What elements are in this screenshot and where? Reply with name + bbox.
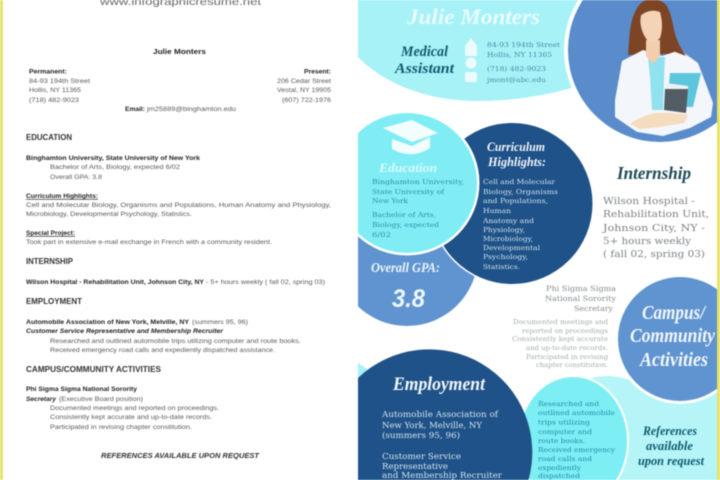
sorority text block: and up-to-date records.	[526, 345, 608, 352]
contact details: Hollis, NY 11365	[487, 51, 552, 59]
education circle: Binghamton University,	[372, 178, 464, 186]
GPA circle	[357, 236, 476, 327]
internship block: Rehabilitation Unit,	[603, 209, 709, 220]
yellow left edge	[0, 0, 3, 480]
illustration: woman with books	[615, 0, 713, 136]
panel: plain text resume	[26, 47, 331, 460]
education section: EDUCATION	[26, 132, 72, 142]
yellow right edge	[717, 0, 720, 480]
education circle: Biology, expected	[372, 221, 440, 229]
employment circle: Customer Service	[382, 451, 461, 461]
campus activities section: Phi Sigma Sigma National Sorority	[26, 386, 137, 393]
education section: Microbiology, Developmental Psychology, Statistics.	[26, 211, 192, 218]
curriculum highlights circle: and Populations,	[483, 197, 548, 205]
education section: Bachelor of Arts, Biology, expected 6/02	[50, 164, 180, 171]
icon: graduation cap	[383, 120, 438, 154]
contact details	[486, 41, 560, 84]
education section: Binghamton University, State University of New York	[26, 155, 200, 162]
internship block: Internship	[616, 163, 691, 183]
employment circle: New York, Melville, NY	[382, 420, 483, 430]
sorority text block: Consistently kept accurate	[512, 336, 608, 343]
sorority text block	[512, 284, 617, 369]
employment section	[26, 296, 301, 354]
employment section: Automobile Association of New York, Melville, NY	[26, 319, 190, 326]
employment circle: and Membership Recruiter	[382, 470, 502, 480]
education section: Special Project:	[26, 230, 75, 237]
employment section: Received emergency road calls and expediently dispatched assistance.	[50, 347, 275, 354]
employment circle: Automobile Association of	[381, 409, 499, 419]
resume name: Julie Monters	[153, 47, 206, 56]
curriculum highlights circle: Human	[483, 207, 512, 215]
internship section: Wilson Hospital - Rehabilitation Unit, Johnson City, NY	[26, 279, 205, 286]
duties circle: dispatched	[538, 472, 581, 480]
internship section	[26, 256, 325, 286]
permanent address: 84-93 194th Street	[29, 78, 90, 85]
duties circle: outlined automobile	[538, 409, 615, 417]
duties circle: computer and	[538, 428, 593, 436]
campus activities circle: Campus/	[642, 302, 707, 324]
employment section: (summers 95, 96)	[192, 319, 248, 326]
curriculum highlights circle: Curriculum	[487, 139, 545, 154]
employment circle: Employment	[392, 374, 486, 395]
references line: REFERENCES AVAILABLE UPON REQUEST	[101, 451, 260, 460]
curriculum highlights circle: Highlights:	[487, 154, 546, 169]
contact icons	[465, 38, 477, 82]
present address: Vestal, NY 19905	[277, 87, 331, 94]
GPA circle: Overall GPA:	[371, 260, 440, 275]
campus activities section: Documented meetings and reported on proceedings.	[50, 405, 219, 412]
email line: jm25889@binghamton.edu	[146, 106, 236, 113]
employment section: Customer Service Representative and Membership Recruiter	[26, 328, 223, 335]
curriculum highlights circle: Physiology,	[483, 226, 525, 234]
permanent address	[29, 68, 90, 104]
sorority text block: reported on proceedings	[522, 328, 608, 335]
contact details: jmont@abc.edu	[486, 76, 547, 84]
email line: Email:	[125, 106, 145, 113]
small cyan triangle	[358, 362, 368, 378]
internship section: - 5+ hours weekly ( fall 02, spring 03)	[206, 279, 325, 286]
duties circle: expediently	[538, 464, 581, 472]
internship block: Wilson Hospital -	[603, 196, 695, 207]
campus activities section: Participated in revising chapter constitution.	[50, 424, 192, 431]
present address	[277, 68, 331, 104]
internship block: 5+ hours weekly	[603, 236, 692, 247]
references text: upon request	[638, 453, 704, 468]
curriculum highlights circle: Psychology,	[483, 253, 528, 261]
employment section: Researched and outlined automobile trips utilizing computer and route books.	[50, 338, 301, 345]
sorority text block: Secretary	[574, 304, 614, 313]
permanent address: Hollis, NY 11365	[29, 87, 81, 94]
curriculum highlights circle: Microbiology,	[483, 235, 533, 243]
permanent address: (718) 482-9023	[29, 97, 79, 104]
duties circle: Received emergency	[538, 446, 615, 454]
present address: 206 Cedar Street	[277, 78, 331, 85]
header cyan shape	[358, 0, 585, 101]
duties circle: road calls and	[538, 455, 593, 463]
internship block: Johnson City, NY -	[602, 223, 705, 234]
sorority text block: chapter constitution.	[536, 362, 608, 369]
employment section: EMPLOYMENT	[26, 296, 83, 306]
employment circle: Representative	[382, 461, 448, 471]
job title	[394, 44, 455, 77]
sorority text block: Phi Sigma Sigma	[546, 284, 617, 293]
campus activities circle: Activities	[638, 349, 708, 371]
references text	[638, 423, 704, 468]
portrait circle	[564, 0, 720, 146]
internship block	[602, 163, 709, 260]
education circle: New York	[372, 197, 409, 205]
curriculum highlights circle	[430, 122, 594, 286]
job title: Medical	[400, 44, 449, 60]
job title: Assistant	[394, 61, 455, 77]
duties circle: Researched and	[538, 400, 600, 408]
GPA circle: 3.8	[392, 285, 425, 313]
sorority text block: National Sorority	[545, 294, 617, 303]
curriculum highlights circle: Cell and Molecular	[483, 178, 556, 186]
education section: Cell and Molecular Biology, Organisms and Populations, Human Anatomy and Physiology,	[26, 202, 331, 209]
references text: available	[646, 438, 693, 453]
contact details: 84-93 194th Street	[487, 41, 560, 49]
light cyan references background	[590, 376, 718, 480]
education section: Overall GPA: 3.8	[50, 174, 102, 181]
curriculum highlights circle: Anatomy and	[482, 217, 535, 225]
duties circle: trips utilizing	[538, 418, 591, 426]
sorority text block: Documented meetings and	[513, 319, 608, 326]
campus activities section	[26, 364, 219, 431]
present address: (607) 722-1976	[282, 97, 331, 104]
curriculum highlights circle: Developmental	[483, 244, 540, 252]
campus activities circle	[615, 274, 720, 404]
internship section: INTERNSHIP	[26, 256, 73, 266]
curriculum highlights circle: Statistics.	[483, 263, 520, 271]
present address: Present:	[304, 68, 331, 76]
campus activities section: CAMPUS/COMMUNITY ACTIVITIES	[26, 364, 161, 374]
campus activities section: Secretary	[26, 396, 56, 403]
education circle: Bachelor of Arts,	[372, 211, 436, 219]
education circle: 6/02	[372, 231, 391, 239]
permanent address: Permanent:	[29, 68, 67, 76]
duties circle: route books.	[538, 437, 585, 445]
references text: References	[642, 423, 697, 438]
contact details: (718) 482-9023	[487, 65, 546, 73]
curriculum highlights circle: Biology, Organisms	[483, 188, 559, 196]
education circle: Education	[378, 160, 437, 175]
panel: infographic resume	[334, 0, 720, 480]
education section: Took part in extensive e-mail exchange in French with a community resident.	[26, 239, 272, 246]
education circle: State University of	[372, 188, 445, 196]
education section	[26, 132, 331, 246]
employment circle: (summers 95, 96)	[382, 430, 460, 440]
campus activities section: Consistently kept accurate and up-to-date records.	[50, 414, 212, 421]
internship block: ( fall 02, spring 03)	[603, 249, 705, 260]
infographic name: Julie Monters	[406, 4, 540, 29]
campus activities section: (Executive Board position)	[59, 396, 143, 403]
education section: Curriculum Highlights:	[26, 193, 98, 200]
sorority text block: Participated in revising	[526, 354, 608, 361]
duties circle	[517, 375, 629, 480]
education circle	[357, 112, 480, 256]
employment circle	[358, 349, 532, 480]
